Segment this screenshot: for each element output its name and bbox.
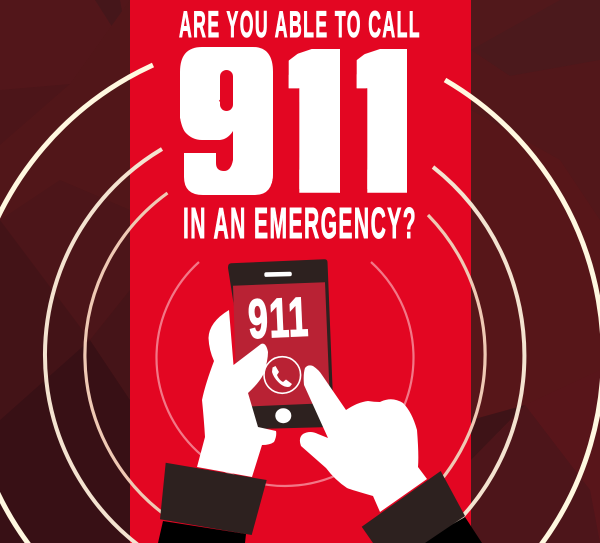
signal ring 2 — [45, 149, 524, 543]
left cuff — [160, 463, 267, 535]
heading: big 911: 1 — [339, 18, 429, 230]
left sleeve — [158, 521, 246, 543]
icon: handset — [272, 366, 292, 387]
heading: big 911 — [180, 47, 407, 195]
signal ring 3 — [85, 193, 485, 520]
panel: red central band — [130, 0, 471, 543]
phone body — [228, 259, 334, 429]
signal ring 4 — [156, 262, 414, 486]
phone — [228, 259, 334, 429]
call button — [264, 357, 301, 393]
home button — [275, 408, 291, 423]
right hand — [300, 365, 427, 512]
panel: left faceted background — [0, 0, 130, 543]
panel: right faceted background — [471, 0, 600, 543]
right sleeve — [420, 517, 482, 543]
phone screen — [233, 282, 330, 407]
heading: big 911: 1 — [272, 18, 361, 230]
phone speaker — [264, 272, 292, 277]
left hand — [197, 310, 276, 477]
phone screen number: 911 — [247, 285, 310, 350]
right cuff — [362, 471, 465, 543]
heading: big 911: 9 — [179, 18, 269, 230]
